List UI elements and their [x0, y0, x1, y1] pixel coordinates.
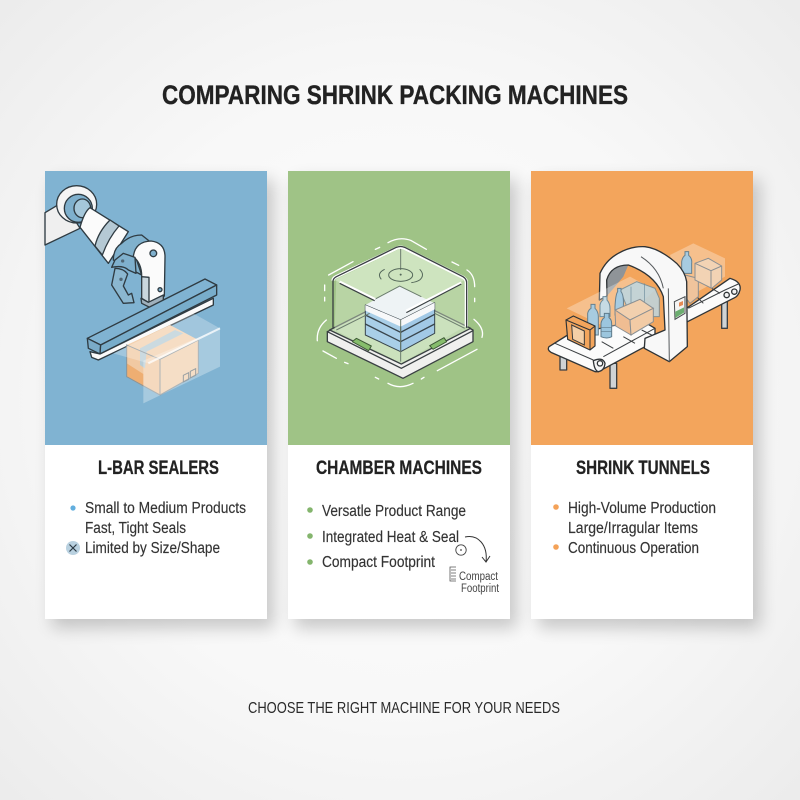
- panel: shrink tunnels card: [531, 171, 753, 619]
- bullet list: shrink tunnels: High-Volume Production: [568, 500, 716, 517]
- bullet list: chamber machines: Versatle Product Range: [322, 503, 466, 520]
- bullet list: L-bar sealers: Limited by Size/Shape: [85, 540, 220, 557]
- panel: chamber machines card: [288, 171, 510, 619]
- bullet list: L-bar sealers: [66, 500, 246, 557]
- bullet list: chamber machines: [307, 503, 466, 571]
- bullet list: shrink tunnels: [553, 500, 716, 557]
- callout: compact footprint: Compact: [459, 571, 499, 583]
- callout: compact footprint: Footprint: [461, 583, 500, 595]
- bullet list: L-bar sealers: Fast, Tight Seals: [85, 520, 186, 537]
- icon: target dial: [456, 545, 466, 555]
- heading: shrink tunnels: SHRINK TUNNELS: [576, 458, 710, 479]
- panel: L-bar sealers card: [45, 171, 267, 619]
- illustration: robotic arm L-bar sealer: [45, 171, 267, 445]
- arrow: curved callout arrow: [465, 537, 490, 562]
- icon: footprint ruler: [450, 567, 456, 581]
- illustration: chamber machine: [288, 171, 510, 445]
- bullet list: shrink tunnels: Continuous Operation: [568, 540, 699, 557]
- illustration: shrink tunnel conveyor: [531, 171, 753, 445]
- heading: chamber machines: CHAMBER MACHINES: [316, 458, 482, 479]
- bullet list: shrink tunnels: Large/Irragular Items: [568, 520, 698, 537]
- bullet list: chamber machines: Compact Footprint: [322, 554, 436, 571]
- title: COMPARING SHRINK PACKING MACHINES: [162, 80, 628, 110]
- bullet list: chamber machines: Integrated Heat & Seal: [322, 529, 459, 546]
- footer tagline: CHOOSE THE RIGHT MACHINE FOR YOUR NEEDS: [248, 700, 560, 717]
- bullet list: L-bar sealers: Small to Medium Products: [85, 500, 246, 517]
- heading: L-bar sealers: L-BAR SEALERS: [98, 458, 219, 479]
- callout: compact footprint: [459, 571, 500, 595]
